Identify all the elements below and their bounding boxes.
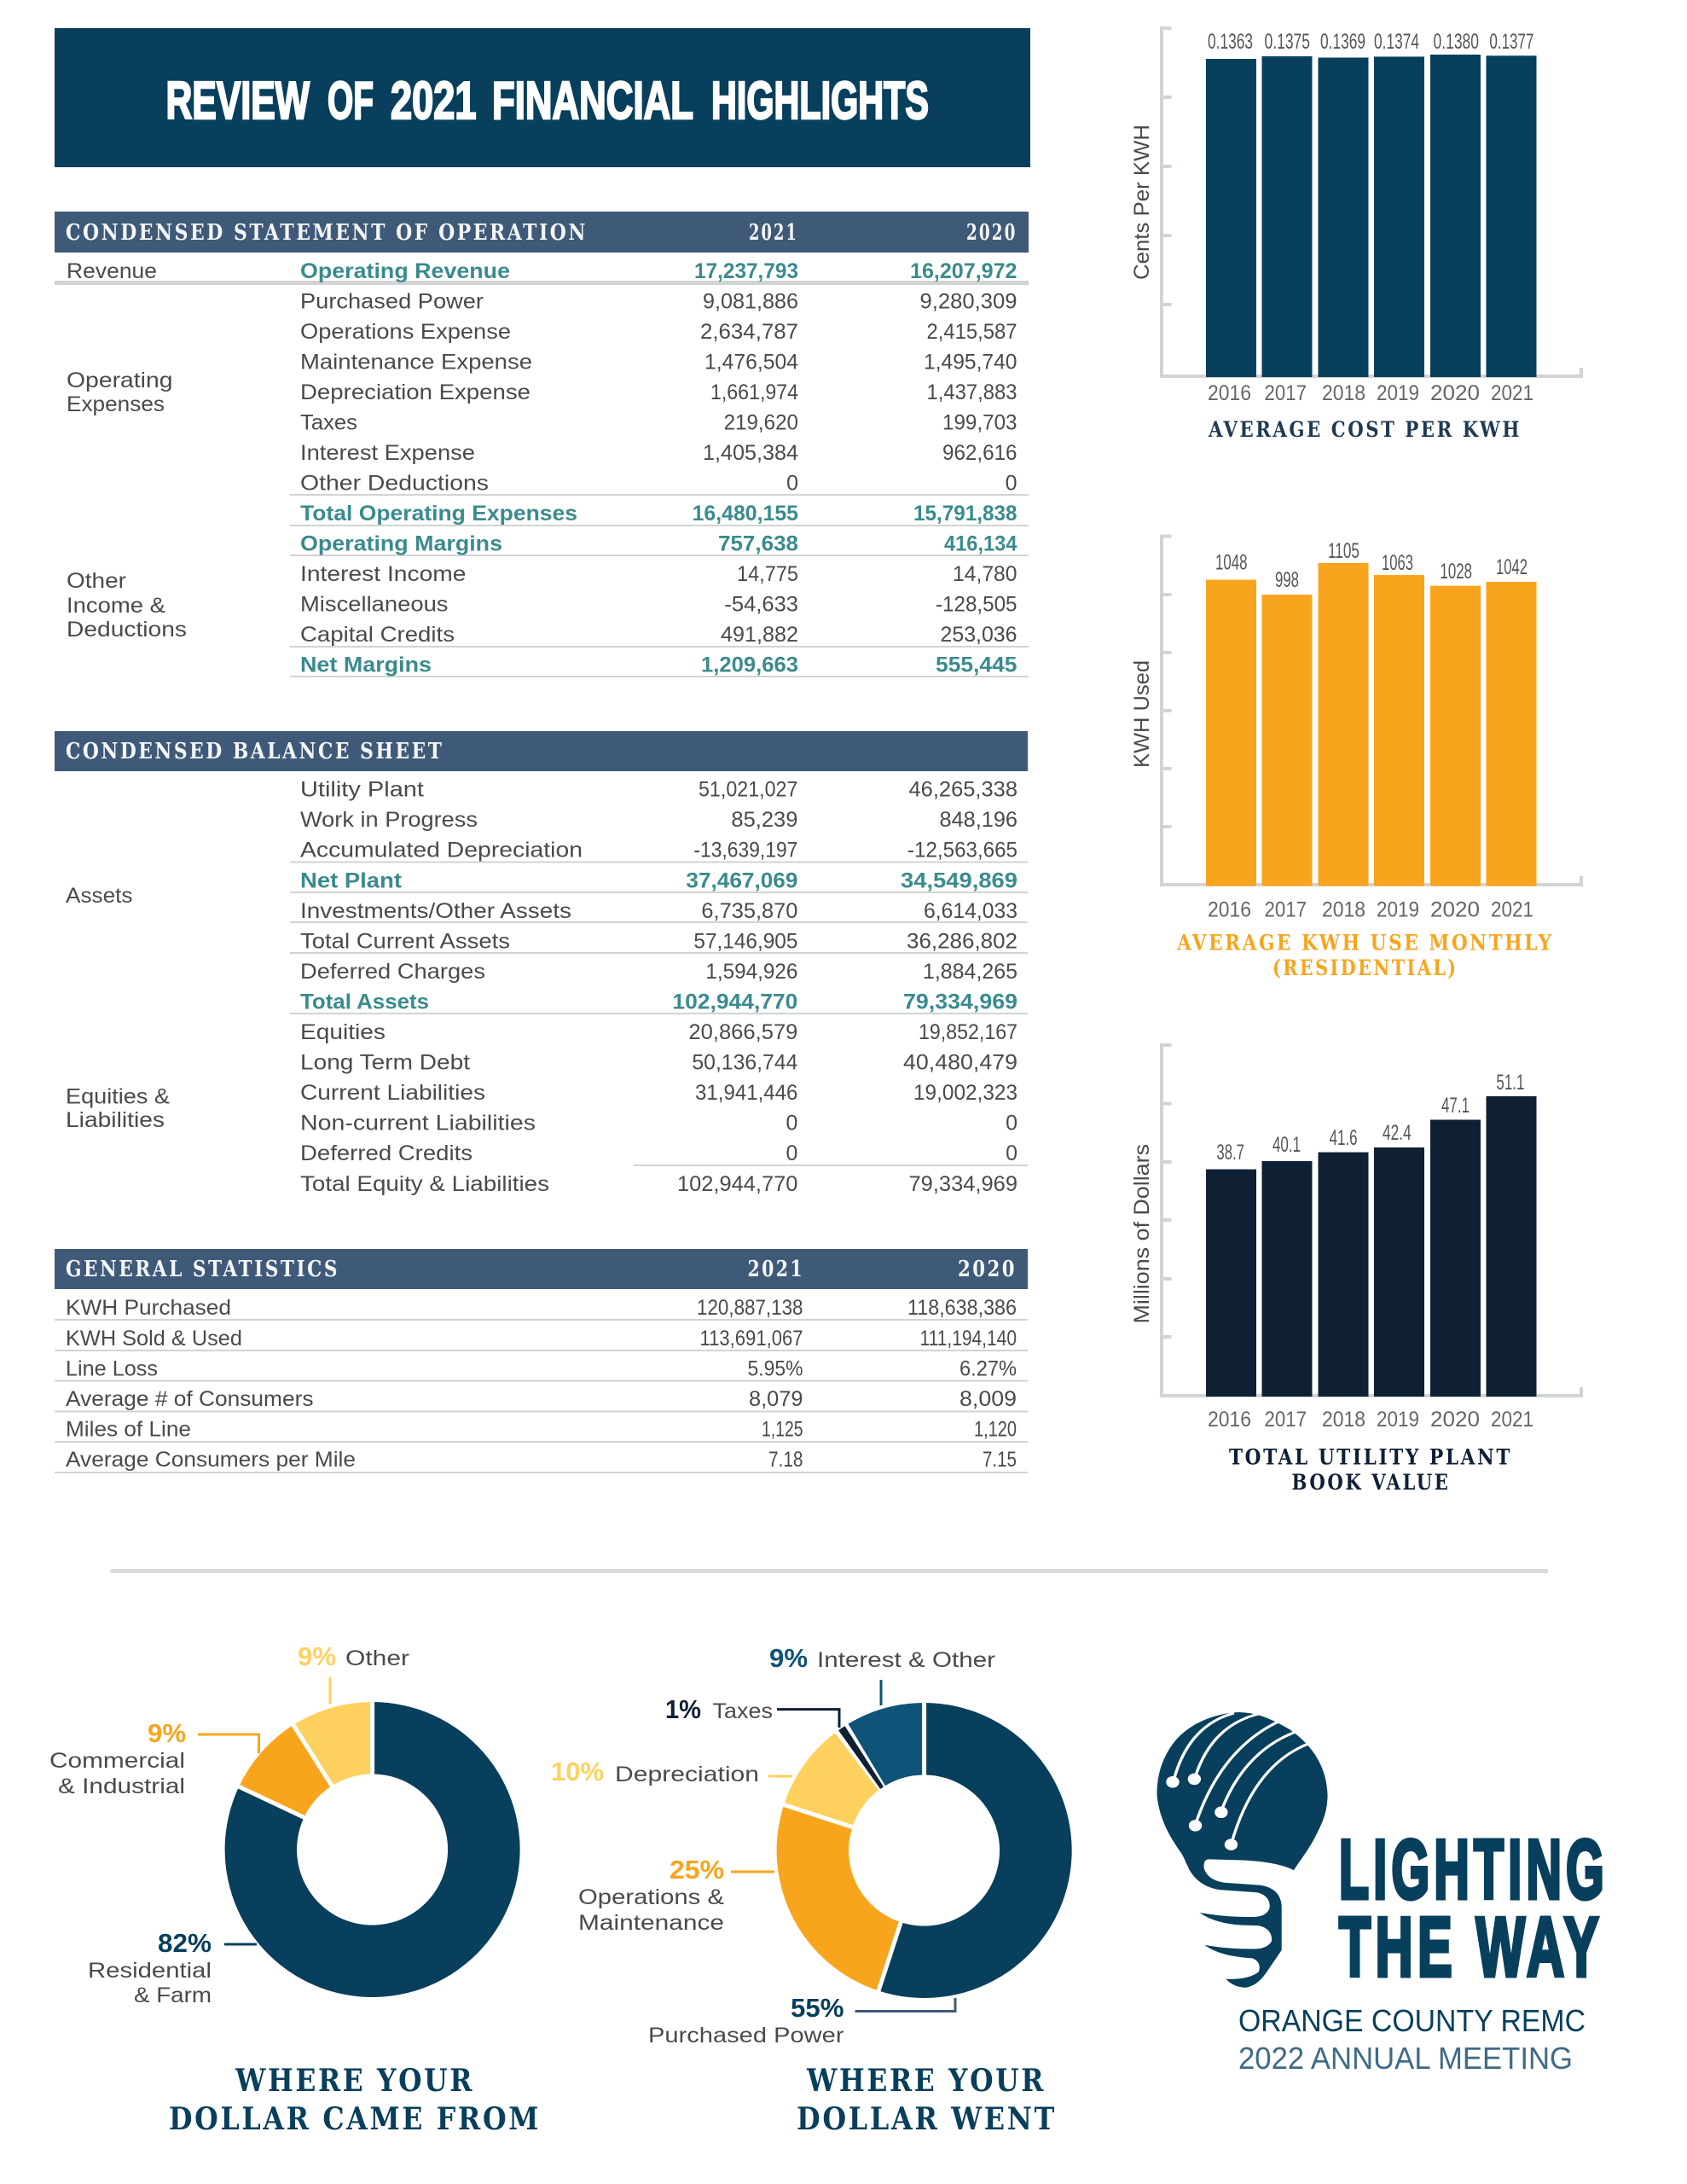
row: Accumulated Depreciation: -12,563,665 <box>907 839 1017 863</box>
row: Long Term Debt: 50,136,744 <box>692 1051 797 1075</box>
row: Operations Expense <box>300 320 1017 344</box>
label: residential and farm <box>88 1928 257 2007</box>
category: Other Income and Deductions: Income & <box>67 594 165 618</box>
chart axes <box>1162 28 1581 376</box>
table header: general statistics: 2021 <box>747 1257 804 1282</box>
year labels <box>1208 1408 1533 1432</box>
chart axes <box>1162 536 1581 885</box>
chart title: (RESIDENTIAL) <box>1272 956 1458 980</box>
year labels <box>1208 381 1533 405</box>
row: Non-current Liabilities <box>300 1112 1017 1136</box>
row: Total Current Assets <box>300 929 1017 953</box>
row: Net Plant: Net Plant <box>300 868 403 892</box>
row: Miscellaneous: -128,505 <box>936 592 1017 616</box>
row: Operating Revenue: Operating Revenue <box>300 259 510 283</box>
row: Operating Margins: Operating Margins <box>300 532 502 556</box>
table header: statement of operation: 2020 <box>966 220 1017 246</box>
row: Total Current Assets: 36,286,802 <box>907 929 1017 953</box>
row: Equities: 20,866,579 <box>688 1020 797 1044</box>
year labels: 2019 <box>1377 1408 1419 1432</box>
row: Net Margins: 1,209,663 <box>701 653 798 677</box>
heading: WHERE YOUR <box>235 2063 474 2099</box>
year labels: 2017 <box>1264 897 1307 921</box>
year labels: 2020 <box>1430 897 1480 921</box>
row: Depreciation Expense: 1,437,883 <box>926 380 1017 404</box>
row: Utility Plant: Utility Plant <box>300 778 424 802</box>
event line: 2022 ANNUAL MEETING <box>1238 2041 1573 2076</box>
category: Equities and Liabilities: Liabilities <box>66 1108 165 1132</box>
row: KWH Purchased: 120,887,138 <box>697 1296 803 1320</box>
value labels: 998 <box>1275 568 1299 592</box>
bars <box>1206 1096 1537 1397</box>
label: commercial and industrial <box>49 1718 259 1798</box>
row: Interest Expense: 962,616 <box>942 441 1017 465</box>
label: interest and other <box>769 1643 995 1705</box>
year labels <box>1208 897 1533 921</box>
row: Non-current Liabilities: 0 <box>1006 1112 1017 1136</box>
segment: residential and farm 82% <box>225 1702 520 1997</box>
row: Operating Revenue <box>300 259 1017 283</box>
category: Other Income and Deductions <box>67 569 187 642</box>
row: Other Deductions: 0 <box>786 471 798 495</box>
row: Miscellaneous: -54,633 <box>724 592 798 616</box>
segment: taxes 1% <box>838 1726 884 1789</box>
logo: lighting the way <box>1157 1712 1609 2076</box>
value labels: 0.1375 <box>1264 30 1310 54</box>
row: Line Loss: 5.95% <box>747 1356 803 1380</box>
row: Taxes: 199,703 <box>942 411 1017 435</box>
row: KWH Purchased <box>66 1296 1017 1320</box>
table header: statement of operation: 2021 <box>749 220 798 246</box>
row: Taxes <box>300 411 1017 435</box>
label: operations and maintenance <box>578 1855 774 1935</box>
row: KWH Purchased: 118,638,386 <box>907 1296 1017 1320</box>
panel: general statistics <box>55 1249 1028 1473</box>
row: Operating Margins: 757,638 <box>718 532 798 556</box>
table header: general statistics: GENERAL STATISTICS <box>66 1257 339 1282</box>
row: Net Margins: 555,445 <box>936 653 1017 677</box>
chart title <box>1229 1445 1512 1495</box>
title banner: REVIEW <box>165 72 310 131</box>
table header: balance sheet <box>55 731 1028 771</box>
year labels: 2017 <box>1264 381 1307 405</box>
row: Miles of Line: Miles of Line <box>66 1418 191 1442</box>
label: operations and maintenance: Operations & <box>578 1885 724 1909</box>
label: taxes: Taxes <box>713 1699 773 1723</box>
row: Depreciation Expense <box>300 380 1017 404</box>
row: Total Current Assets: Total Current Assets <box>300 929 510 953</box>
row: Work in Progress <box>300 808 1017 832</box>
row: KWH Sold and Used: 111,194,140 <box>919 1327 1017 1350</box>
value labels: 0.1377 <box>1489 30 1533 54</box>
row: Purchased Power: Purchased Power <box>300 290 484 314</box>
label: taxes <box>665 1694 839 1728</box>
row: Investments/Other Assets: 6,735,870 <box>701 899 797 923</box>
value labels <box>1215 539 1528 592</box>
logo wordmark <box>1339 1822 1609 1994</box>
label: purchased power <box>648 1993 955 2048</box>
table header: statement of operation <box>55 212 1029 253</box>
label: other <box>298 1641 409 1704</box>
row: Total Assets <box>300 990 1017 1014</box>
row: Total Equity and Liabilities: 102,944,770 <box>677 1172 797 1196</box>
row: Taxes: Taxes <box>300 411 357 435</box>
row: Purchased Power: 9,280,309 <box>919 290 1017 314</box>
row: Maintenance Expense: 1,495,740 <box>924 350 1017 374</box>
donut chart: where your dollar came from <box>49 1641 541 2137</box>
value labels <box>1216 1071 1524 1165</box>
category: Operating Expenses <box>67 369 172 416</box>
chart title: BOOK VALUE <box>1291 1470 1450 1495</box>
row: Non-current Liabilities: 0 <box>786 1112 797 1136</box>
category: Other Income and Deductions: Deductions <box>67 618 187 642</box>
row: Non-current Liabilities: Non-current Liabilities <box>300 1112 536 1136</box>
row: Maintenance Expense: Maintenance Expense <box>300 350 532 374</box>
row: KWH Sold and Used: KWH Sold & Used <box>66 1327 242 1350</box>
row: Long Term Debt: 40,480,479 <box>903 1051 1017 1075</box>
row: Investments/Other Assets: Investments/Other Assets <box>300 899 571 923</box>
row: Average Consumers per Mile: 7.15 <box>983 1448 1017 1472</box>
row: Long Term Debt <box>300 1051 1017 1075</box>
row: Deferred Charges: Deferred Charges <box>300 960 485 984</box>
row: Miscellaneous <box>300 592 1017 616</box>
row: Purchased Power: 9,081,886 <box>703 290 798 314</box>
row: Line Loss <box>66 1356 1017 1380</box>
organisation name: ORANGE COUNTY REMC <box>1238 2003 1586 2038</box>
title banner <box>55 28 1030 167</box>
bar chart: average cost per kwh <box>1130 28 1581 442</box>
row: Current Liabilities: 31,941,446 <box>695 1081 797 1105</box>
row: Total Assets: Total Assets <box>300 990 429 1014</box>
bar chart: average kwh use monthly <box>1130 536 1581 980</box>
row: Other Deductions <box>300 471 1017 495</box>
value labels: 0.1374 <box>1374 30 1419 54</box>
value labels: 1042 <box>1496 555 1528 579</box>
row: Other Deductions: Other Deductions <box>300 471 489 495</box>
row: Net Plant: 34,549,869 <box>901 868 1017 892</box>
row: Interest Income: 14,775 <box>737 562 798 586</box>
label: operations and maintenance: Maintenance <box>578 1911 724 1935</box>
row: Line Loss: Line Loss <box>66 1356 158 1380</box>
row: Operations Expense: 2,634,787 <box>700 320 798 344</box>
year labels: 2019 <box>1377 381 1419 405</box>
bars <box>1206 563 1537 886</box>
row: Operating Margins <box>300 532 1017 556</box>
row: Long Term Debt: Long Term Debt <box>300 1051 470 1075</box>
label: taxes: 1% <box>665 1694 701 1724</box>
row: Interest Income: Interest Income <box>300 562 466 586</box>
panel: condensed statement of operation <box>55 212 1029 677</box>
row: Deferred Credits: 0 <box>1006 1141 1017 1165</box>
heading: DOLLAR CAME FROM <box>169 2101 541 2137</box>
row: Accumulated Depreciation: -13,639,197 <box>693 839 797 863</box>
value labels: 40.1 <box>1272 1133 1301 1157</box>
category: Other Income and Deductions: Other <box>67 569 126 593</box>
label: interest and other: 9% <box>769 1643 808 1673</box>
year labels: 2018 <box>1322 381 1365 405</box>
value labels: 0.1369 <box>1320 30 1365 54</box>
heading: WHERE YOUR <box>806 2063 1046 2099</box>
year labels: 2018 <box>1322 897 1365 921</box>
title banner: 2021 <box>391 72 476 131</box>
bars <box>1206 55 1537 377</box>
value labels: 1063 <box>1382 551 1413 575</box>
label: other: 9% <box>298 1641 336 1671</box>
row: Total Operating Expenses: 15,791,838 <box>913 502 1017 526</box>
label: commercial and industrial: & Industrial <box>58 1774 185 1798</box>
label: operations and maintenance: 25% <box>670 1855 724 1885</box>
row: Deferred Charges: 1,884,265 <box>923 960 1017 984</box>
row: Interest Expense: Interest Expense <box>300 441 475 465</box>
row: Operations Expense: 2,415,587 <box>926 320 1017 344</box>
label: residential and farm: 82% <box>158 1928 212 1958</box>
label: depreciation: Depreciation <box>615 1763 759 1786</box>
heading <box>169 2063 541 2137</box>
table header: statement of operation: CONDENSED STATEMENT OF OPERATION <box>66 220 588 246</box>
icon: light bulb <box>1157 1712 1328 1988</box>
label: purchased power: Purchased Power <box>648 2024 844 2048</box>
segment: depreciation 10% <box>784 1733 878 1827</box>
row: Average number of Consumers: 8,009 <box>959 1387 1017 1411</box>
row: Utility Plant: 46,265,338 <box>909 778 1017 802</box>
row: Average number of Consumers: 8,079 <box>749 1387 803 1411</box>
category: Operating Expenses: Operating <box>67 369 172 392</box>
year labels: 2021 <box>1491 897 1533 921</box>
chart title: AVERAGE COST PER KWH <box>1208 417 1522 442</box>
row: Utility Plant: 51,021,027 <box>699 778 797 802</box>
title banner: FINANCIAL <box>492 72 693 131</box>
row: Average Consumers per Mile <box>66 1448 1017 1472</box>
row: Total Operating Expenses: Total Operating Expenses <box>300 502 577 526</box>
label: purchased power: 55% <box>791 1993 844 2023</box>
label: depreciation <box>551 1757 792 1786</box>
title banner: HIGHLIGHTS <box>711 72 929 131</box>
value labels: 1105 <box>1328 539 1359 563</box>
row: Interest Income <box>300 562 1017 586</box>
row: Total Assets: 79,334,969 <box>903 990 1017 1014</box>
label: residential and farm: Residential <box>88 1959 212 1983</box>
value labels: 47.1 <box>1441 1094 1470 1118</box>
row: Operations Expense: Operations Expense <box>300 320 511 344</box>
segment: interest and other 9% <box>848 1703 925 1786</box>
row: Other Deductions: 0 <box>1006 471 1017 495</box>
row: Average Consumers per Mile: Average Consumers per Mile <box>66 1448 356 1472</box>
row: Depreciation Expense: 1,661,974 <box>710 380 798 404</box>
row: Operating Revenue: 17,237,793 <box>694 259 798 283</box>
value labels: 0.1380 <box>1433 30 1479 54</box>
year labels: 2020 <box>1430 1408 1480 1432</box>
row: Average Consumers per Mile: 7.18 <box>768 1448 803 1472</box>
row: Average number of Consumers: Average # of Consumers <box>66 1387 314 1411</box>
value labels <box>1208 30 1533 54</box>
row: Current Liabilities <box>300 1081 1017 1105</box>
row: Work in Progress: 848,196 <box>940 808 1017 832</box>
value labels: 41.6 <box>1330 1126 1358 1150</box>
row: Miscellaneous: Miscellaneous <box>300 592 449 616</box>
table header: general statistics <box>55 1249 1028 1289</box>
row: Maintenance Expense: 1,476,504 <box>704 350 798 374</box>
row: Capital Credits: 253,036 <box>940 623 1017 647</box>
chart title: AVERAGE KWH USE MONTHLY <box>1176 930 1554 956</box>
label: interest and other: Interest & Other <box>817 1648 995 1672</box>
year labels: 2016 <box>1208 1408 1251 1432</box>
segment: purchased power 55% <box>878 1703 1072 1998</box>
row: Net Margins <box>300 653 1017 677</box>
segment: operations and maintenance 25% <box>777 1805 901 1991</box>
label: commercial and industrial: 9% <box>148 1718 186 1748</box>
row: Deferred Charges: 1,594,926 <box>705 960 797 984</box>
table header: balance sheet: CONDENSED BALANCE SHEET <box>66 739 443 764</box>
row: Purchased Power <box>300 290 1017 314</box>
row: Equities: 19,852,167 <box>919 1020 1017 1044</box>
row: Accumulated Depreciation <box>300 839 1017 863</box>
row: Work in Progress: Work in Progress <box>300 808 478 832</box>
segment: other 9% <box>293 1702 373 1786</box>
label: residential and farm: & Farm <box>134 1984 212 2007</box>
row: Capital Credits: Capital Credits <box>300 623 455 647</box>
chart title <box>1176 930 1554 980</box>
value labels: 51.1 <box>1496 1071 1524 1095</box>
row: KWH Purchased: KWH Purchased <box>66 1296 231 1320</box>
table header: general statistics: 2020 <box>958 1257 1017 1282</box>
category: Equities and Liabilities: Equities & <box>66 1085 170 1109</box>
title banner: OF <box>328 72 374 131</box>
category: Revenue: Revenue <box>67 259 157 283</box>
value labels: 0.1363 <box>1208 30 1253 54</box>
row: Capital Credits <box>300 623 1017 647</box>
row: Investments/Other Assets <box>300 899 1017 923</box>
value labels: 42.4 <box>1383 1121 1412 1145</box>
row: Deferred Charges <box>300 960 1017 984</box>
row: Average number of Consumers <box>66 1387 1017 1411</box>
row: Interest Income: 14,780 <box>953 562 1017 586</box>
row: Equities: Equities <box>300 1020 386 1044</box>
row: Miles of Line: 1,125 <box>762 1418 803 1442</box>
category: Assets: Assets <box>66 884 133 908</box>
chart axes <box>1162 1045 1581 1396</box>
row: Net Plant: 37,467,069 <box>686 868 797 892</box>
label: commercial and industrial: Commercial <box>49 1749 185 1773</box>
row: Miles of Line <box>66 1418 1017 1442</box>
value labels: 1048 <box>1215 551 1247 575</box>
row: Equities <box>300 1020 1017 1044</box>
year labels: 2019 <box>1377 897 1419 921</box>
y axis label: KWH Used <box>1130 660 1154 768</box>
label: other: Other <box>345 1647 409 1670</box>
value labels: 1028 <box>1440 560 1472 584</box>
row: Deferred Credits: Deferred Credits <box>300 1141 472 1165</box>
bar chart: total utility plant book value <box>1130 1045 1581 1495</box>
row: Total Equity and Liabilities: 79,334,969 <box>909 1172 1017 1196</box>
row: Miles of Line: 1,120 <box>974 1418 1017 1442</box>
label: depreciation: 10% <box>551 1757 604 1786</box>
year labels: 2020 <box>1430 381 1480 405</box>
row: Depreciation Expense: Depreciation Expense <box>300 380 530 404</box>
row: Accumulated Depreciation: Accumulated Depreciation <box>300 839 583 863</box>
donut chart: where your dollar went <box>551 1643 1072 2137</box>
year labels: 2018 <box>1322 1408 1365 1432</box>
year labels: 2021 <box>1491 1408 1533 1432</box>
panel: condensed balance sheet <box>55 731 1028 1196</box>
row: Work in Progress: 85,239 <box>731 808 797 832</box>
row: KWH Sold and Used <box>66 1327 1017 1350</box>
year labels: 2017 <box>1264 1408 1307 1432</box>
row: Total Operating Expenses <box>300 502 1017 526</box>
row: Total Operating Expenses: 16,480,155 <box>693 502 798 526</box>
chart title: TOTAL UTILITY PLANT <box>1229 1445 1512 1469</box>
row: Interest Expense <box>300 441 1017 465</box>
category: Equities and Liabilities <box>66 1085 170 1132</box>
category: Operating Expenses: Expenses <box>67 392 165 416</box>
year labels: 2021 <box>1491 381 1533 405</box>
row: Utility Plant <box>300 778 1017 802</box>
year labels: 2016 <box>1208 381 1251 405</box>
row: KWH Sold and Used: 113,691,067 <box>699 1327 803 1350</box>
row: Net Margins: Net Margins <box>300 653 432 677</box>
heading: DOLLAR WENT <box>797 2101 1057 2137</box>
row: Current Liabilities: Current Liabilities <box>300 1081 485 1105</box>
row: Taxes: 219,620 <box>724 411 798 435</box>
row: Maintenance Expense <box>300 350 1017 374</box>
year labels: 2016 <box>1208 897 1251 921</box>
row: Deferred Credits: 0 <box>786 1141 797 1165</box>
row: Total Current Assets: 57,146,905 <box>693 929 797 953</box>
row: Operating Revenue: 16,207,972 <box>910 259 1017 283</box>
row: Interest Expense: 1,405,384 <box>703 441 798 465</box>
y axis label: Millions of Dollars <box>1130 1144 1154 1324</box>
row: Operating Margins: 416,134 <box>944 532 1017 556</box>
row: Net Plant <box>300 868 1017 892</box>
row: Capital Credits: 491,882 <box>721 623 798 647</box>
row: Current Liabilities: 19,002,323 <box>913 1081 1017 1105</box>
y axis label: Cents Per KWH <box>1130 125 1154 280</box>
row: Investments/Other Assets: 6,614,033 <box>924 899 1017 923</box>
row: Total Equity and Liabilities <box>300 1172 1017 1196</box>
row: Line Loss: 6.27% <box>959 1356 1017 1380</box>
row: Deferred Credits <box>300 1141 1017 1165</box>
value labels: 38.7 <box>1216 1141 1244 1165</box>
heading <box>797 2063 1057 2137</box>
segment: commercial and industrial 9% <box>239 1725 332 1817</box>
row: Total Assets: 102,944,770 <box>672 990 797 1014</box>
row: Total Equity and Liabilities: Total Equity & Liabilities <box>300 1172 549 1196</box>
